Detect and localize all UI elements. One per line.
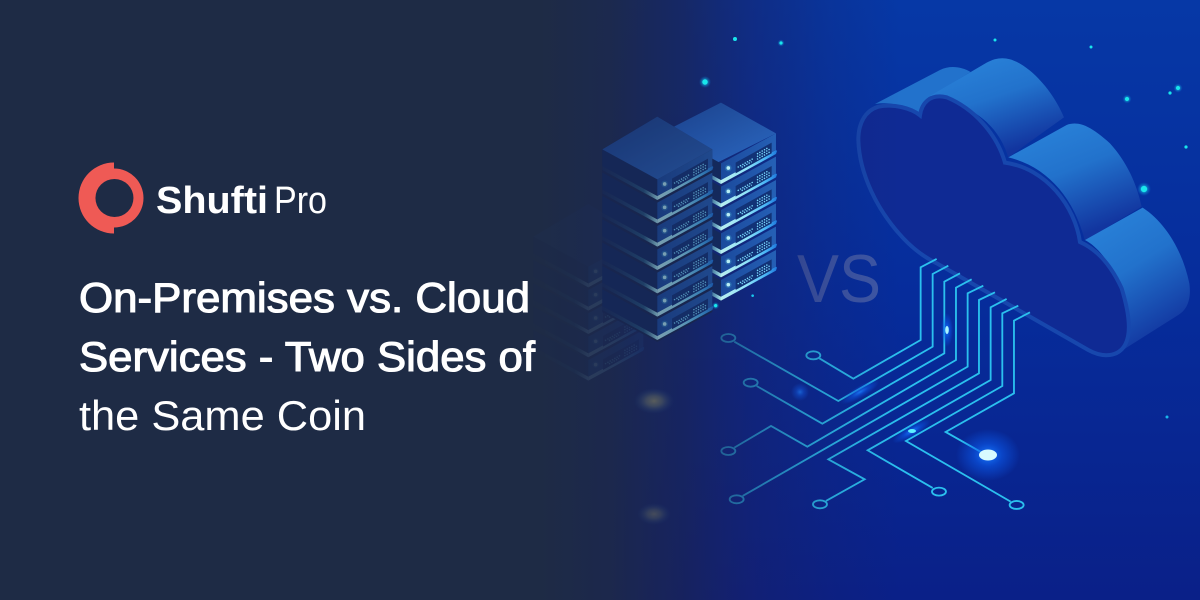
title: On-Premises vs. Cloud bbox=[79, 274, 530, 321]
circuit glows bbox=[791, 313, 1020, 481]
server racks bbox=[533, 103, 777, 381]
cloud extrusion segments bbox=[875, 58, 1190, 355]
server stack: left faded bbox=[533, 204, 644, 381]
server stack: back right bbox=[658, 103, 777, 309]
logo wordmark Pro: Pro bbox=[274, 180, 327, 222]
particles bbox=[699, 37, 1188, 418]
title: the Same Coin bbox=[79, 392, 366, 439]
server stack: front centre bbox=[602, 117, 713, 342]
title: Services - Two Sides of bbox=[79, 333, 535, 380]
title bbox=[79, 274, 535, 439]
logo: Shufti Pro bbox=[78, 162, 268, 234]
circuit traces bbox=[721, 259, 1030, 509]
left dark fade overlay bbox=[0, 0, 900, 600]
faint floor lights bbox=[634, 388, 674, 525]
VS label: VS bbox=[797, 241, 881, 317]
logo wordmark: Shufti bbox=[156, 180, 268, 222]
cloud bbox=[858, 58, 1190, 355]
logo ring mark bbox=[78, 162, 144, 234]
cloud front face bbox=[858, 96, 1129, 355]
